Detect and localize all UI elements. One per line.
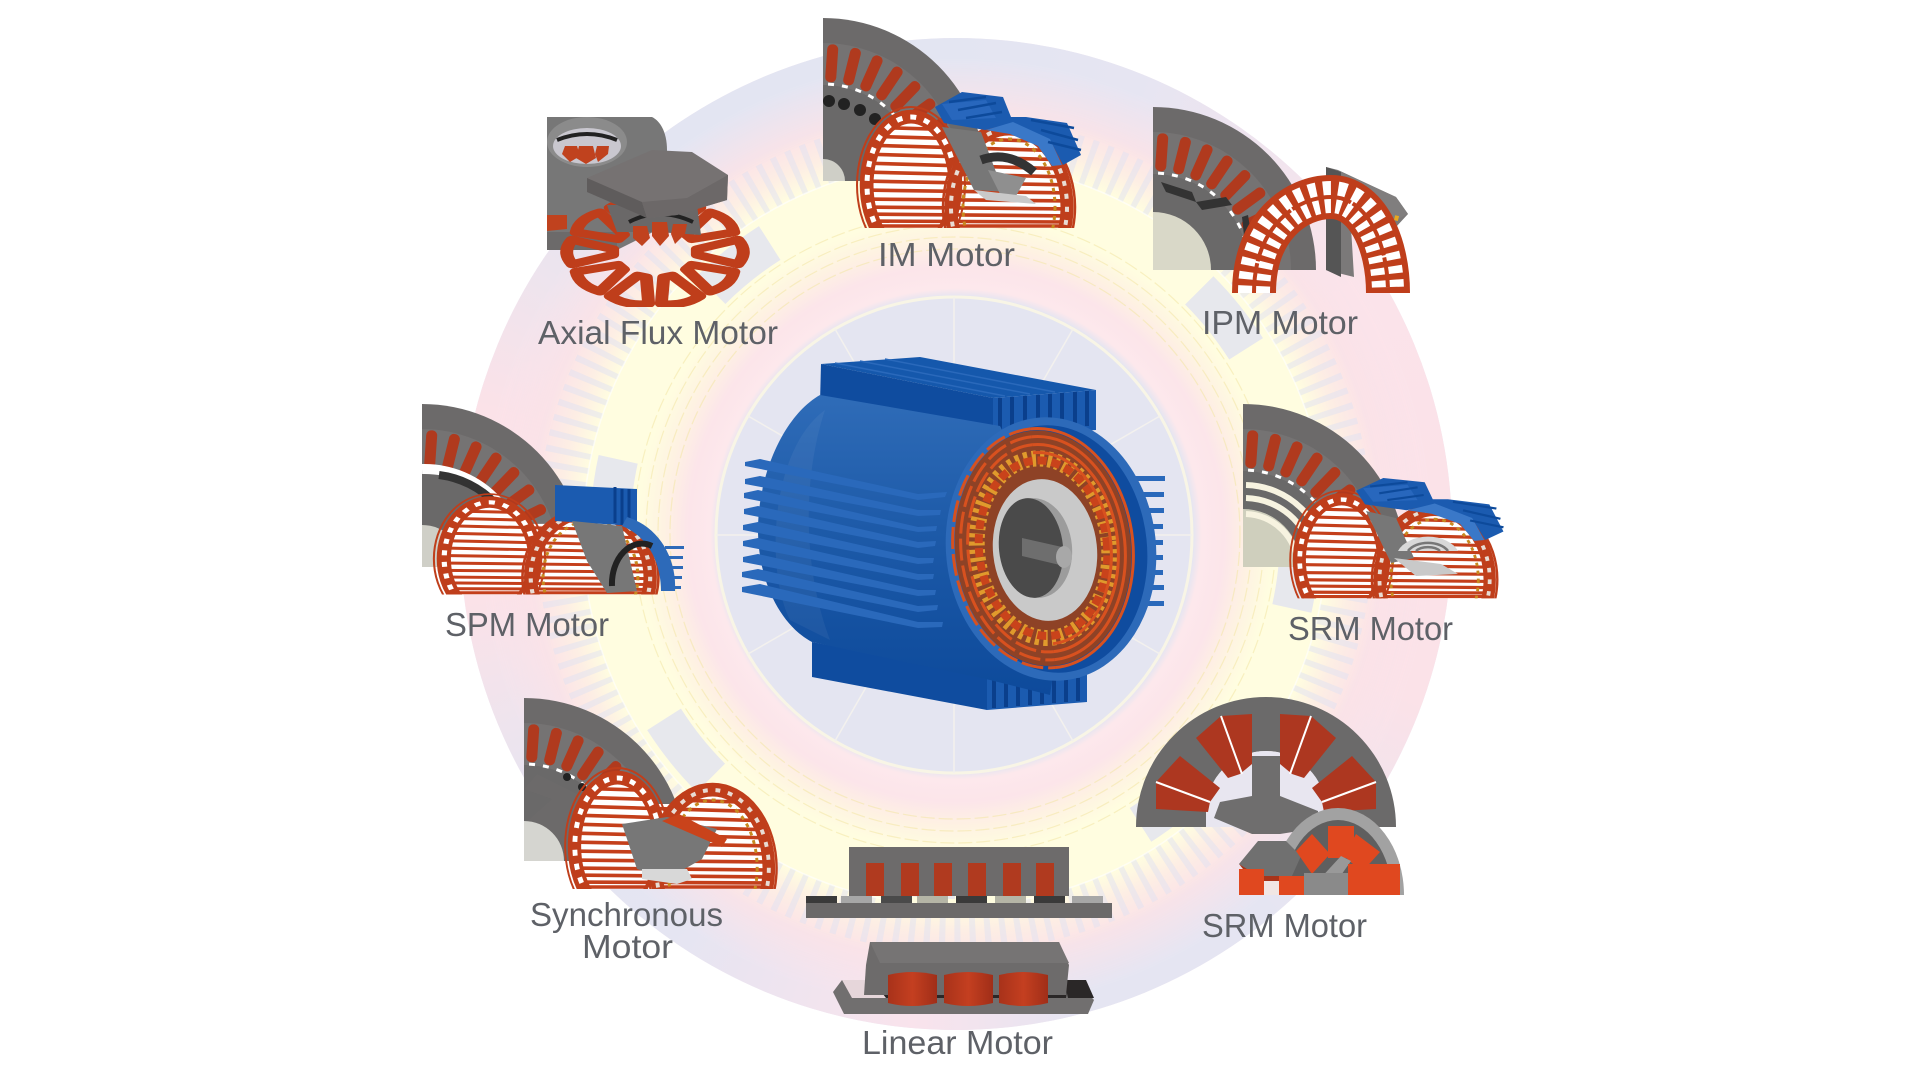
- label: SRM motor, upper: SRM Motor: [1288, 610, 1453, 647]
- label: axial flux motor: Axial Flux Motor: [538, 314, 778, 351]
- centre disc: [716, 297, 1192, 773]
- label: IM motor: IM Motor: [878, 236, 1015, 273]
- central motor illustration: [742, 357, 1169, 710]
- top fins: [820, 357, 1096, 436]
- lower linear stage: [833, 942, 1094, 1014]
- stator slot pattern: [560, 139, 1350, 929]
- right fins: [1125, 476, 1165, 606]
- motor: interior permanent magnet: [990, 107, 1408, 433]
- label: linear motor: Linear Motor: [862, 1024, 1053, 1061]
- label: synchronous motor: [530, 896, 723, 965]
- motor: linear: [806, 847, 1112, 1014]
- rotor and shaft: [986, 474, 1104, 626]
- bottom fins: [812, 642, 1087, 710]
- motor: induction: [660, 18, 1081, 344]
- motor body: [758, 395, 1070, 695]
- motor: synchronous: [361, 698, 782, 1024]
- motor: switched reluctance, top: [1080, 404, 1503, 730]
- motor: surface permanent magnet: [259, 404, 684, 730]
- label: synchronous motor: Synchronous: [530, 896, 723, 933]
- left fins: [742, 459, 947, 628]
- label: SRM motor, lower: SRM Motor: [1202, 907, 1367, 944]
- stator windings: [941, 419, 1145, 677]
- end face ring: [933, 407, 1169, 691]
- label: SPM motor: SPM Motor: [445, 606, 609, 643]
- background disc: [464, 38, 1451, 1030]
- motor: switched reluctance, bottom: [1136, 697, 1404, 895]
- motor: axial flux: [547, 117, 743, 307]
- label: IPM motor: IPM Motor: [1202, 304, 1358, 341]
- upper linear stage: [806, 847, 1112, 918]
- label: synchronous motor: Motor: [582, 928, 673, 965]
